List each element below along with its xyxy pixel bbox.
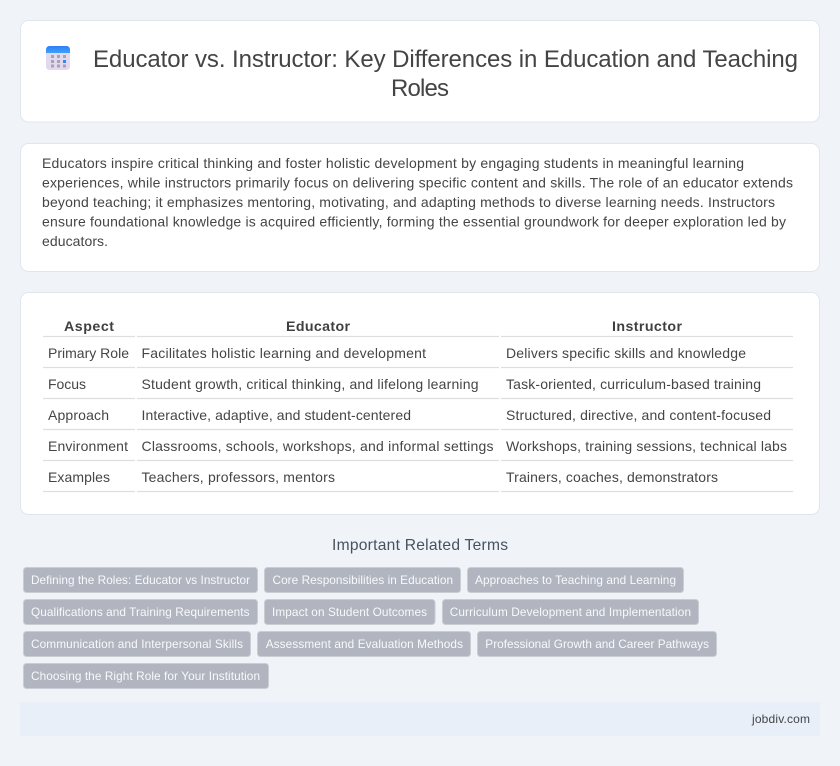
heading: important related terms: Important Related Terms: [332, 537, 508, 554]
panel: related term tags: Impact on Student Outcomes: [272, 605, 427, 619]
table row: examples: Teachers, professors, mentors: [142, 469, 335, 485]
table header row: Instructor: [612, 319, 682, 335]
table row: primary role: Primary Role: [48, 345, 129, 361]
panel: related term tags: Qualifications and Training Requirements: [31, 605, 250, 619]
title: Educator vs. Instructor: Key Differences in Education and Teaching: [93, 46, 798, 73]
panel: related term tags: Choosing the Right Role for Your Institution: [31, 669, 260, 683]
panel: introduction paragraph: [20, 144, 820, 272]
panel: related term tags: Curriculum Development and Implementation: [450, 605, 691, 619]
panel: related term tags: [24, 568, 716, 688]
table header row: Aspect: [64, 319, 114, 335]
table row: approach: [48, 407, 771, 423]
table row: focus: [48, 376, 761, 392]
table row: focus: Student growth, critical thinking, and lifelong learning: [142, 376, 478, 392]
table header row: [64, 319, 682, 335]
table row: approach: Approach: [48, 407, 109, 423]
table header row: Educator: [286, 319, 350, 335]
text block: introduction: educators.: [42, 233, 108, 249]
text block: introduction: experiences, while instructors primarily focus on delivering specific content and skills. The role of an educator extends: [42, 174, 793, 190]
text block: introduction: [42, 155, 793, 249]
table row: examples: [48, 469, 718, 485]
panel: related term tags: Core Responsibilities in Education: [272, 573, 453, 587]
panel: related term tags: Professional Growth and Career Pathways: [485, 637, 709, 651]
panel: related term tags: Approaches to Teaching and Learning: [475, 573, 676, 587]
panel: related term tags: Defining the Roles: Educator vs Instructor: [31, 573, 250, 587]
text block: introduction: ensure foundational knowledge is acquired efficiently, forming the essential groundwork for deeper exploration led by: [42, 214, 786, 230]
table row: approach: Interactive, adaptive, and student-centered: [142, 407, 411, 423]
text block: introduction: Educators inspire critical thinking and foster holistic development by engaging students in meaningful learning: [42, 155, 744, 171]
table row: focus: Task-oriented, curriculum-based training: [506, 376, 761, 392]
panel: comparison table: [20, 292, 820, 514]
table row: primary role: [48, 345, 746, 361]
title: Roles: [391, 75, 449, 102]
table row: primary role: Delivers specific skills and knowledge: [506, 345, 746, 361]
table row: environment: [48, 438, 787, 454]
table row: environment: Workshops, training sessions, technical labs: [506, 438, 787, 454]
table row: focus: Focus: [48, 376, 86, 392]
table row: primary role: Facilitates holistic learning and development: [142, 345, 426, 361]
table row: approach: Structured, directive, and content-focused: [506, 407, 771, 423]
table row: environment: Environment: [48, 438, 128, 454]
footer: jobdiv.com: [751, 712, 810, 726]
title: [93, 46, 798, 102]
table row: examples: Examples: [48, 469, 110, 485]
footer: [20, 702, 820, 736]
panel: related term tags: Assessment and Evaluation Methods: [266, 637, 463, 651]
table row: examples: Trainers, coaches, demonstrators: [506, 469, 718, 485]
icon: calendar: [46, 46, 70, 70]
panel: header: [20, 20, 820, 122]
text block: introduction: beyond teaching; it emphasizes mentoring, motivating, and adapting methods to diverse learning needs. Instructors: [42, 194, 775, 210]
panel: related term tags: Communication and Interpersonal Skills: [31, 637, 243, 651]
table row: environment: Classrooms, schools, workshops, and informal settings: [142, 438, 494, 454]
